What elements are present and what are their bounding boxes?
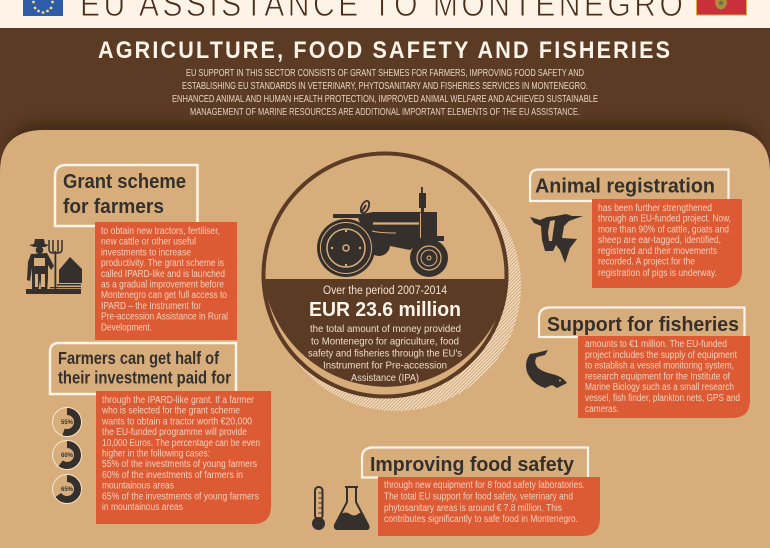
body text: registered and their movements (598, 246, 717, 257)
circle description: the total amount of money provided (310, 323, 461, 335)
intro text: MANAGEMENT OF MARINE RESOURCES ARE ADDITIONAL IMPORTANT ELEMENTS OF THE EU ASSISTANCE. (190, 106, 580, 118)
heading (63, 170, 186, 218)
circle description: safety and fisheries through the EU's (308, 348, 462, 360)
panel: half investment (50, 343, 271, 524)
panel: food safety (312, 448, 600, 536)
body text: amounts to €1 million. The EU-funded (585, 339, 727, 350)
circle description (308, 323, 462, 384)
body text: mountainous areas (102, 481, 174, 492)
heading frame (362, 448, 588, 478)
body text: productivity. The grant scheme is (101, 258, 224, 269)
icon: cow (530, 214, 583, 263)
body text: contributes significantly to safe food in Montenegro. (384, 514, 578, 525)
intro text (172, 67, 598, 118)
heading: Improving food safety (370, 453, 575, 476)
body text: vessel, fish finder, plankton nets, GPS and (585, 393, 740, 404)
icon: fish (526, 350, 567, 388)
text card (95, 222, 237, 340)
body text: the EU-funded programme will provide (102, 427, 247, 438)
body text: Development. (101, 322, 152, 334)
body text: registration of pigs is underway. (598, 268, 717, 279)
body text: to establish a vessel monitoring system, (585, 361, 734, 372)
heading frame (539, 308, 744, 337)
page header background (0, 0, 770, 28)
body text: 65% of the investments of young farmers (102, 491, 259, 502)
circle bottom fill (264, 279, 508, 387)
body text (598, 203, 731, 279)
intro text: ESTABLISHING EU STANDARDS IN VETERINARY, PHYTOSANITARY AND FISHERIES SERVICES IN MONTENEGRO. (182, 80, 588, 92)
section heading: AGRICULTURE, FOOD SAFETY AND FISHERIES (98, 36, 670, 63)
circle description: Instrument for Pre-accession (323, 360, 447, 372)
tan content panel (0, 130, 770, 548)
text card (578, 336, 750, 418)
heading (58, 348, 231, 388)
intro text: ENHANCED ANIMAL AND HUMAN HEALTH PROTECTION, IMPROVED ANIMAL WELFARE AND ACHIEVED SUSTAINABLE (172, 93, 598, 105)
body text: through the IPARD-like grant. If a farmer (102, 395, 255, 406)
body text: investments to increase (101, 247, 191, 258)
heading frame (530, 170, 728, 201)
heading frame (50, 343, 236, 394)
amount: EUR 23.6 million (309, 298, 461, 321)
text card (378, 477, 600, 536)
body text (384, 480, 585, 525)
panel: central circle (264, 154, 521, 411)
circle top (264, 154, 506, 396)
heading: Grant scheme (63, 170, 186, 193)
body text: Pre-accession Assistance in Rural (101, 312, 228, 323)
hatched circle shadow (271, 161, 521, 411)
icon: thermometer (312, 487, 325, 530)
donut: 55% (52, 408, 82, 436)
body text: project includes the supply of equipment (585, 350, 737, 361)
panel: grant scheme (26, 165, 237, 340)
donut: 65%: 65% (61, 487, 74, 493)
body text: through an EU-funded project. Now, (598, 214, 731, 225)
icon: EU flag (23, 0, 63, 16)
body text: research equipment for the Institute of (585, 371, 730, 382)
body text: more than 90% of cattle, goats and (598, 224, 729, 235)
circle description: to Montenegro for agriculture, food (311, 336, 459, 348)
body text (101, 395, 260, 513)
body text: who is selected for the grant scheme (101, 406, 240, 417)
donut: 60%: 60% (61, 453, 74, 459)
body text: recorded. A project for the (598, 256, 695, 268)
body text: phytosanitary areas is around € 7.8 million. This (384, 503, 562, 514)
intro text: EU SUPPORT IN THIS SECTOR CONSISTS OF GRANT SHEMES FOR FARMERS, IMPROVING FOOD SAFETY AND (186, 67, 584, 79)
body text: cameras. (585, 404, 619, 415)
panel: fisheries (526, 308, 750, 418)
circle description: Assistance (IPA) (351, 372, 419, 384)
body text: IPARD – the Instrument for (101, 301, 202, 312)
icon: farmer (26, 239, 82, 294)
body text: Montenegro can get full access to (101, 290, 227, 301)
body text: higher in the following cases: (102, 448, 210, 460)
donut: 55%: 55% (61, 420, 74, 426)
text card (96, 391, 271, 524)
body text: to obtain new tractors, fertiliser, (101, 226, 220, 237)
text card (592, 199, 742, 288)
body text: sheep are ear-tagged, identified, (598, 235, 721, 246)
icon: Montenegro flag (696, 0, 746, 15)
body text: has been further strengthened (598, 203, 712, 214)
heading: Animal registration (535, 174, 715, 198)
body text: wants to obtain a tractor worth €20,000 (101, 416, 252, 427)
heading: Support for fisheries (547, 313, 739, 336)
body text: 55% of the investments of young farmers (102, 459, 257, 470)
body text: new cattle or other useful (101, 237, 196, 248)
panel: animal registration (530, 170, 742, 288)
body text: 60% of the investments of farmers in (102, 470, 243, 481)
body text: called IPARD-like and is launched (101, 269, 225, 280)
body text: as a gradual improvement before (101, 280, 224, 290)
heading: their investment paid for (58, 368, 231, 388)
donut: 65% (52, 474, 82, 504)
body text (101, 226, 228, 334)
heading: Farmers can get half of (58, 348, 219, 368)
donut: 60% (52, 440, 82, 470)
panel shadow (8, 124, 762, 184)
heading: for farmers (63, 195, 164, 218)
heading frame (55, 165, 198, 226)
body text (585, 339, 740, 415)
icon: tractor (317, 187, 448, 277)
period label: Over the period 2007-2014 (323, 285, 448, 297)
body text: through new equipment for 8 food safety laboratories. (384, 480, 585, 491)
body text: Marine Biology such as a small research (585, 382, 734, 393)
icon: flask (334, 487, 369, 530)
body text: The total EU support for food safety, veterinary and (384, 492, 573, 502)
body text: 10,000 Euros. The percentage can be even (102, 438, 260, 449)
body text: in mountainous areas (102, 502, 183, 513)
